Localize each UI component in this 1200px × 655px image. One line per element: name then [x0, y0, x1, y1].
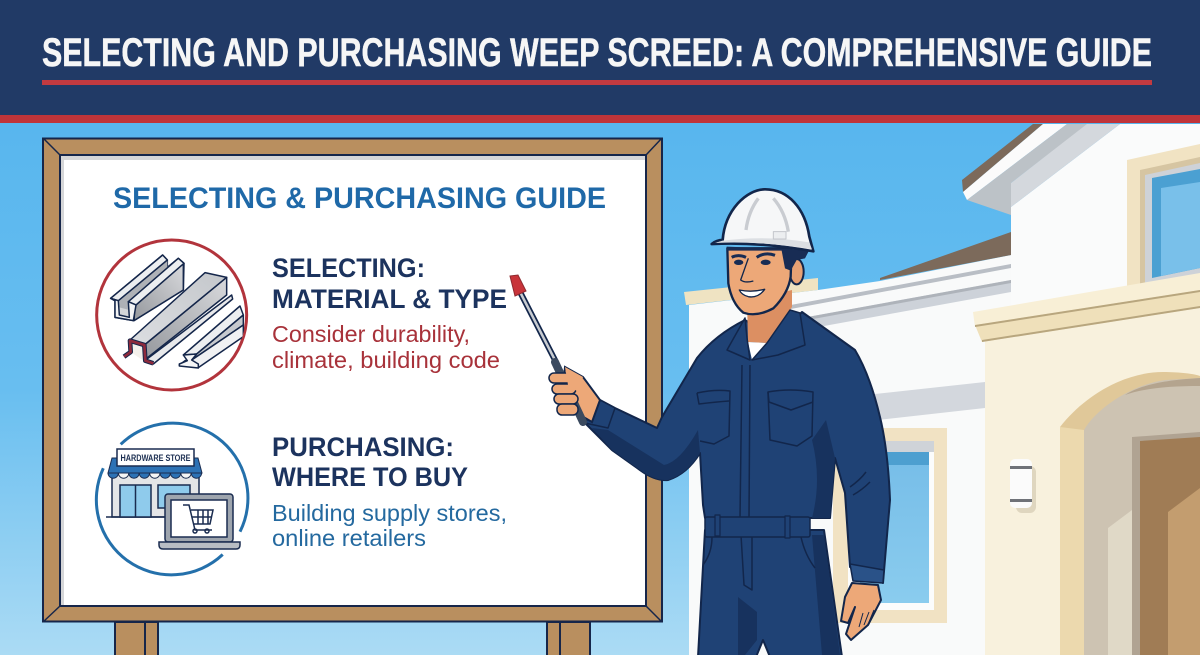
selecting text block: climate, building code	[272, 347, 500, 373]
icon: metal screed profiles	[97, 240, 247, 390]
worker figure	[585, 189, 890, 655]
face	[727, 248, 792, 314]
front cornice	[973, 273, 1200, 342]
fingers gripping pointer	[549, 367, 583, 415]
back wing cream cap	[684, 278, 818, 305]
hair	[727, 247, 809, 271]
placket and pockets	[697, 365, 813, 518]
wall lamp	[1010, 459, 1036, 513]
back wing wall	[689, 255, 1011, 655]
belt	[705, 515, 810, 538]
hand right	[841, 583, 881, 640]
eyes	[734, 260, 771, 265]
laptop	[159, 494, 240, 549]
back wing cornice bands	[780, 264, 1011, 334]
collar	[727, 310, 805, 360]
nose	[741, 258, 753, 282]
neck and shirt	[747, 290, 792, 360]
head	[712, 189, 813, 314]
ear	[790, 259, 804, 284]
selecting text block: MATERIAL & TYPE	[272, 284, 507, 314]
header banner	[0, 0, 1200, 123]
store sign: HARDWARE STORE	[120, 453, 190, 463]
purchasing text block: PURCHASING:	[272, 432, 454, 462]
brows	[732, 254, 775, 257]
hand palm holding pointer	[562, 367, 600, 422]
selecting text block: SELECTING:	[272, 253, 425, 283]
shopping cart	[183, 505, 213, 533]
upper wall	[1011, 124, 1200, 340]
cuff right	[850, 564, 884, 583]
lower wall grey band	[700, 382, 985, 440]
selecting text block	[272, 253, 507, 373]
arm creases	[850, 472, 870, 495]
icon: hardware store and laptop	[96, 423, 248, 575]
eave	[962, 124, 1120, 215]
store sign	[117, 449, 194, 466]
purchasing text block	[272, 432, 507, 551]
purchasing text block: WHERE TO BUY	[272, 462, 468, 492]
pointer stick	[510, 275, 583, 422]
board heading: SELECTING & PURCHASING GUIDE	[113, 182, 606, 215]
purchasing text block: Building supply stores,	[272, 500, 507, 526]
store building	[106, 474, 199, 517]
front cream wall	[985, 305, 1200, 655]
helmet	[712, 189, 813, 251]
building background	[684, 124, 1200, 655]
trousers	[698, 530, 842, 655]
board frame	[43, 138, 662, 622]
smile	[739, 289, 765, 297]
store awning	[108, 458, 202, 478]
lower window	[833, 428, 947, 623]
cuff left	[585, 400, 615, 428]
rail: large hat channel	[124, 273, 233, 364]
arch and door	[1060, 372, 1200, 655]
back wing brown roof	[880, 232, 1011, 280]
board legs	[115, 622, 590, 655]
upper window	[1127, 144, 1200, 290]
purchasing text block: online retailers	[272, 525, 426, 551]
rail: small profile	[179, 306, 243, 368]
rail: U channel	[111, 255, 184, 321]
selecting text block: Consider durability,	[272, 321, 470, 347]
jacket torso and arms	[585, 312, 890, 583]
